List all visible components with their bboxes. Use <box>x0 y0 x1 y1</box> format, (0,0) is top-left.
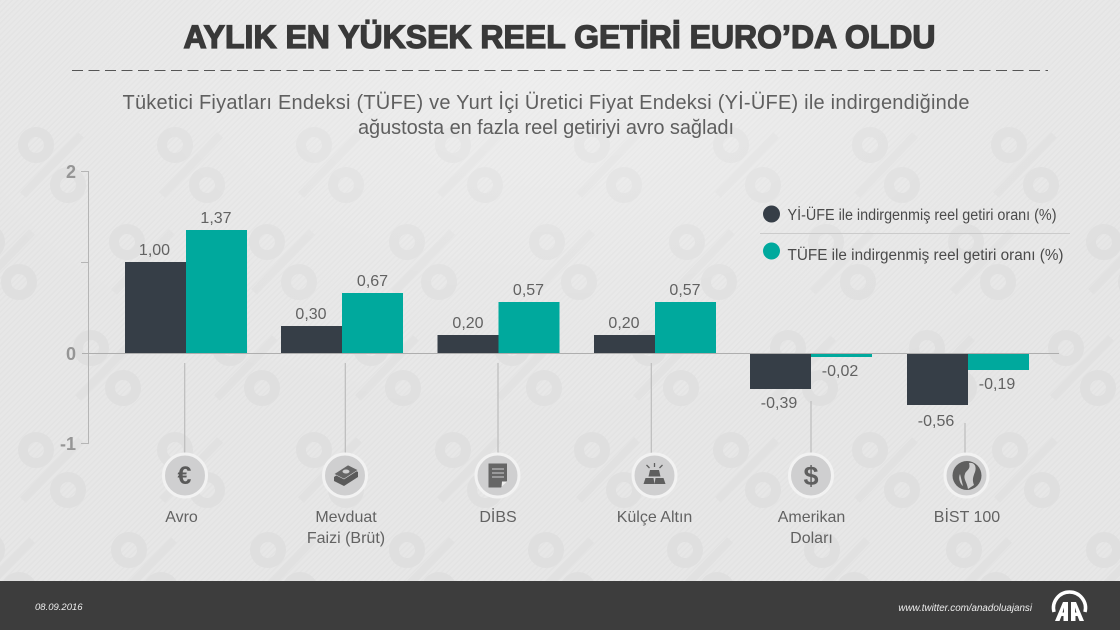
y axis: 0 <box>66 344 76 364</box>
legend <box>760 206 1070 264</box>
icon: banknotes <box>324 454 366 497</box>
connector lines <box>185 363 965 453</box>
group: DİBS <box>438 282 560 353</box>
subtitle: Tüketici Fiyatları Endeksi (TÜFE) ve Yurt İçi Üretici Fiyat Endeksi (Yİ-ÜFE) ile indirgendiğinde <box>122 91 970 114</box>
legend item: TÜFE: TÜFE ile indirgenmiş reel getiri oranı (%) <box>788 246 1064 264</box>
group: DİBS: 0,20 <box>452 315 484 332</box>
twitter address: www.twitter.com/anadoluajansi <box>898 603 1033 614</box>
category labels: Faizi (Brüt) <box>307 530 385 547</box>
icon: gold bars <box>633 454 676 497</box>
category labels <box>165 507 1000 547</box>
icon: document <box>476 454 519 497</box>
title: AYLIK EN YÜKSEK REEL GETİRİ EURO’DA OLDU <box>184 19 936 55</box>
group: Külçe Altın: 0,57 <box>669 282 701 299</box>
group: Külçe Altın <box>594 282 716 353</box>
footer bar <box>0 581 1120 630</box>
icon: euro: € <box>178 462 192 490</box>
date: 08.09.2016 <box>35 602 83 613</box>
logo: AA <box>1054 592 1086 621</box>
group: Avro: 1,00 <box>139 242 170 259</box>
group: Avro: 1,37 <box>200 210 232 227</box>
icon: dollar <box>790 454 832 497</box>
group: Mevduat <box>281 273 403 353</box>
group: Külçe Altın: 0,20 <box>608 315 640 332</box>
group: Amerikan Doları: -0,02 <box>822 363 858 380</box>
group: DİBS: 0,57 <box>513 282 544 299</box>
category labels: BİST 100 <box>934 507 1000 526</box>
group: Amerikan Doları <box>750 353 872 412</box>
legend item: Yİ-ÜFE: Yİ-ÜFE ile indirgenmiş reel getiri oranı (%) <box>788 206 1056 224</box>
icon: dollar: $ <box>803 461 819 491</box>
category labels: DİBS <box>479 507 517 526</box>
group: Mevduat: 0,30 <box>295 306 327 323</box>
y axis: -1 <box>60 434 76 454</box>
category labels: Mevduat <box>315 509 377 526</box>
icon: euro <box>164 454 206 497</box>
category labels: Amerikan <box>778 509 845 526</box>
subtitle: ağustosta en fazla reel getiriyi avro sağladı <box>358 117 734 139</box>
group: BİST 100 <box>907 353 1029 430</box>
group: BİST 100: -0,19 <box>979 376 1015 393</box>
bar chart <box>125 210 1029 430</box>
group: Avro <box>125 210 247 353</box>
y axis <box>60 162 88 454</box>
y axis: 2 <box>66 162 76 182</box>
category labels: Külçe Altın <box>617 509 692 526</box>
subtitle <box>122 91 970 139</box>
group: BİST 100: -0,56 <box>918 413 954 430</box>
category labels: Avro <box>165 509 198 526</box>
group: Amerikan Doları: -0,39 <box>761 395 797 412</box>
category labels: Doları <box>790 530 833 547</box>
group: Mevduat: 0,67 <box>357 273 388 290</box>
icon: BIST logo <box>945 454 988 497</box>
